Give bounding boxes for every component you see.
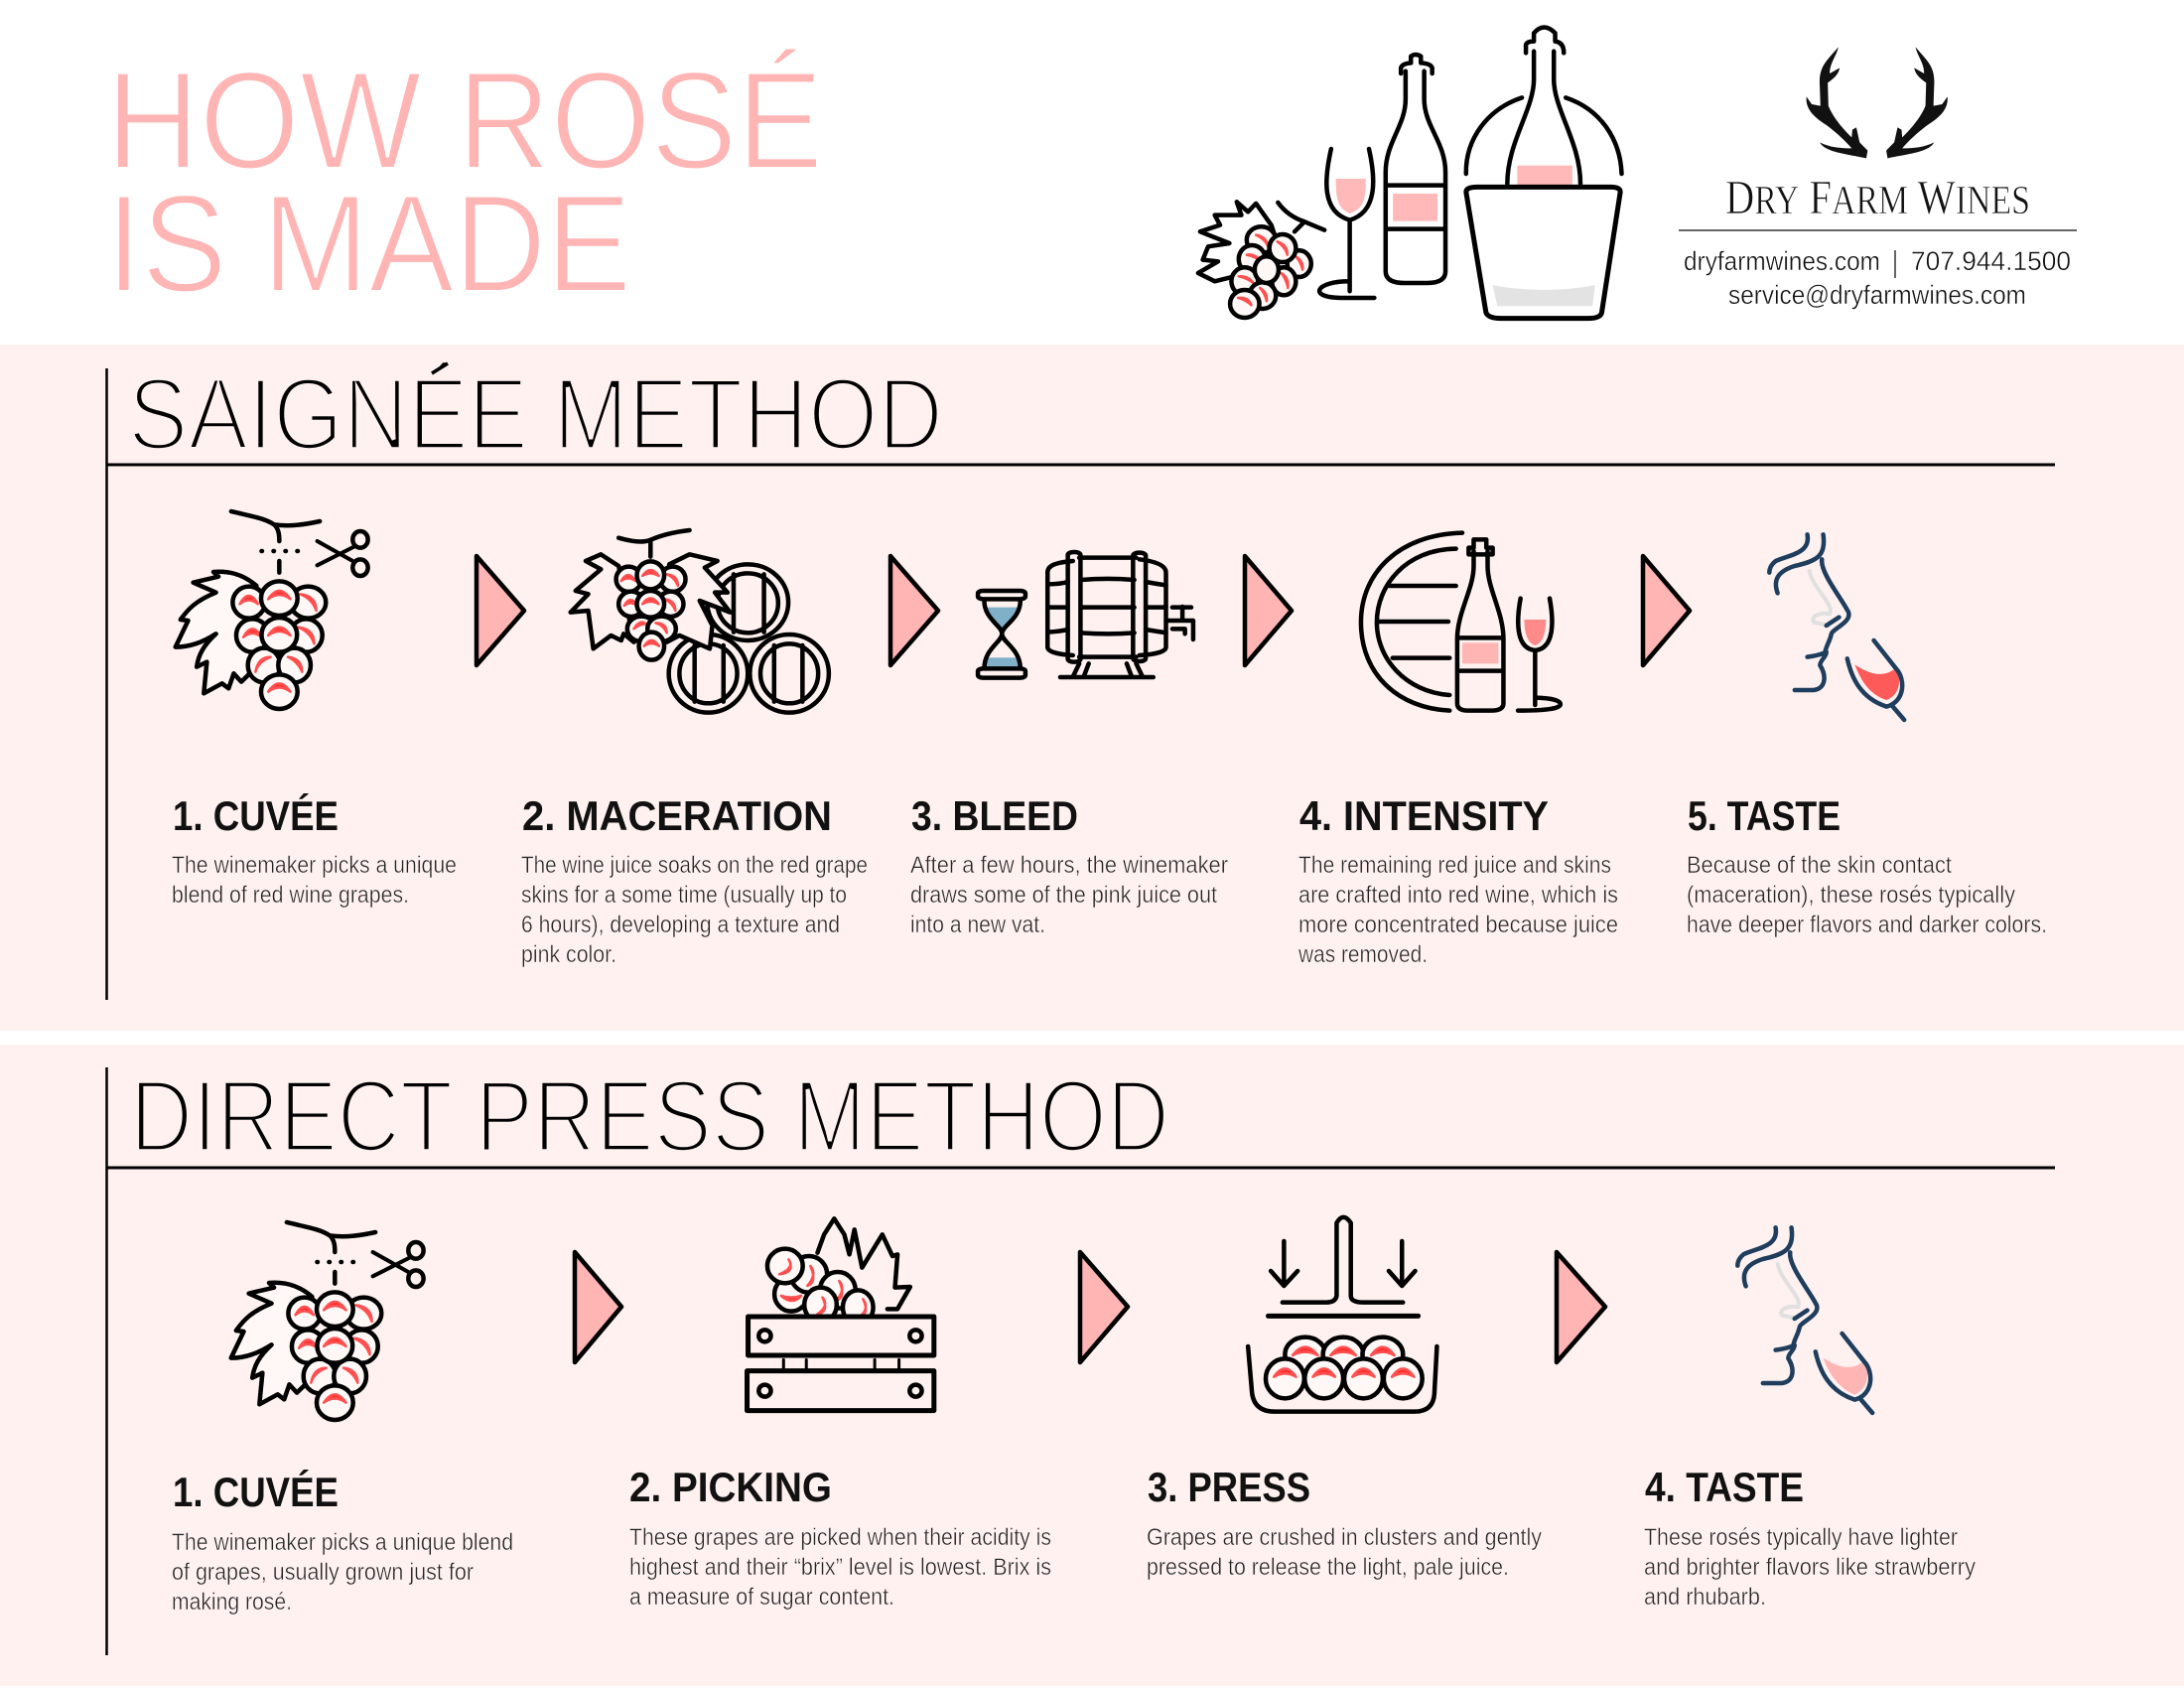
step: taste [1644,1464,1976,1611]
panel: direct press method [0,1045,2184,1686]
icon: bottle in ice bucket [1466,27,1622,319]
icon: face smelling rosé [1737,1227,1872,1413]
step: cuvée: 1. CUVÉE [173,792,339,839]
step: cuvée: The winemaker picks a unique [172,852,457,879]
step: cuvée: The winemaker picks a unique blend [172,1529,513,1556]
panel background [0,345,2184,1031]
step: picking: 2. PICKING [629,1464,832,1510]
step: picking: These grapes are picked when their acidity is [629,1524,1051,1551]
phone: 707.944.1500 [1911,246,2071,276]
arrow [477,556,524,665]
arrow [1643,556,1690,665]
step: maceration: pink color. [521,941,616,968]
step: cuvée [172,792,457,909]
panel: saignée method [0,345,2184,1031]
brand block [1679,170,2077,310]
heading: saignée method: SAIGNÉE METHOD [128,357,943,471]
step: taste [1687,792,2047,938]
step: press: pressed to release the light, pale juice. [1147,1554,1509,1581]
email: service@dryfarmwines.com [1728,280,2026,310]
step: picking: a measure of sugar content. [629,1584,894,1611]
step: press: 3. PRESS [1148,1464,1310,1510]
step: press [1147,1464,1542,1581]
icon: barrel with tap [1047,552,1193,677]
icon: wine bottle [1386,55,1445,283]
heading: direct press method: DIRECT PRESS METHOD [130,1058,1169,1174]
step: taste: (maceration), these rosés typically [1687,882,2015,909]
step: cuvée: 1. CUVÉE [173,1469,339,1515]
step: maceration [521,792,868,968]
title [106,42,823,322]
step: cuvée: blend of red wine grapes. [172,882,409,909]
step: cuvée [172,1469,513,1616]
step: cuvée: of grapes, usually grown just for [172,1559,474,1586]
step: taste: have deeper flavors and darker colors. [1687,912,2047,938]
icon: grape cluster and scissors [176,511,368,709]
arrow [1245,556,1292,665]
arrow [1557,1252,1605,1362]
brand name: DRY FARM WINES [1725,170,2030,224]
arrow [1080,1252,1128,1362]
step: taste: and brighter flavors like strawberry [1644,1554,1976,1581]
icon: grapes and barrels [571,530,829,713]
icon: grape bunch [1198,202,1324,318]
header illustration: grapes, glass, bottles, ice bucket [1198,27,1948,319]
step: intensity: more concentrated because juice [1298,912,1618,938]
step: taste: Because of the skin contact [1687,852,1952,879]
step: taste: 5. TASTE [1688,792,1841,839]
step: picking [629,1464,1051,1611]
panel background [0,1045,2184,1686]
step: taste: and rhubarb. [1644,1584,1766,1611]
step: cuvée: making rosé. [172,1589,292,1616]
icon: grape cluster and scissors [231,1222,424,1420]
step: bleed: After a few hours, the winemaker [910,852,1228,879]
step: bleed [910,792,1228,938]
title: HOW ROSÉ [106,42,823,199]
step: picking: highest and their “brix” level is lowest. Brix is [629,1554,1051,1581]
step: bleed: into a new vat. [910,912,1045,938]
step: taste: 4. TASTE [1645,1464,1804,1510]
step: press: Grapes are crushed in clusters and gently [1147,1524,1542,1551]
step: bleed: 3. BLEED [911,792,1078,839]
step: maceration: 6 hours), developing a texture and [521,912,840,938]
icon: antler logo [1807,47,1948,158]
step: intensity: 4. INTENSITY [1299,792,1549,839]
step: intensity [1297,792,1618,968]
website: dryfarmwines.com [1684,246,1880,276]
icon: grapes in crates [748,1218,934,1411]
icon: wine glass [1319,149,1374,298]
step: intensity: are crafted into red wine, which is [1298,882,1618,909]
arrow [575,1252,621,1362]
step: taste: These rosés typically have lighter [1644,1524,1958,1551]
step: bleed: draws some of the pink juice out [910,882,1217,909]
step: maceration: 2. MACERATION [522,792,832,839]
step: maceration: skins for a some time (usually up to [521,882,847,909]
step: intensity: The remaining red juice and skins [1298,852,1611,879]
icon: grape press [1248,1217,1436,1412]
arrow [890,556,938,665]
step: maceration: The wine juice soaks on the red grape [521,852,868,879]
icon: barrel, bottle and glass [1361,533,1561,711]
icon: face smelling red rosé [1769,534,1904,720]
title: IS MADE [106,165,631,322]
icon: hourglass [978,591,1025,678]
step: intensity: was removed. [1297,941,1428,968]
